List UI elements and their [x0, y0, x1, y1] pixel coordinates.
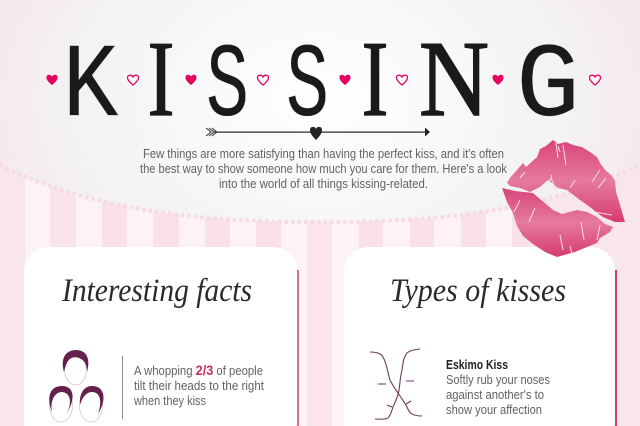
title: N [419, 20, 489, 139]
upper lip [507, 140, 625, 222]
title: S [286, 28, 329, 147]
panel: types of kisses [344, 247, 617, 426]
heading: types of kisses: Types of kisses [390, 273, 566, 309]
canopy backdrop [0, 0, 640, 222]
intro text: the best way to show someone how much you care for them. Here's a look [140, 162, 508, 176]
heading: interesting facts: Interesting facts [61, 273, 252, 309]
text: fact one: when they kiss [133, 394, 206, 408]
title: G [516, 28, 580, 147]
intro text: into the world of all things kissing-related. [219, 177, 428, 191]
intro text: Few things are more satisfying than having the perfect kiss, and it's often [143, 147, 504, 161]
text: eskimo kiss: against another's to [446, 388, 544, 402]
title: S [206, 28, 249, 147]
icon: eskimo kiss faces [370, 349, 422, 419]
title: K [63, 28, 118, 147]
text: fact one: A whopping 2/3 of people [134, 362, 263, 378]
text: fact one: tilt their heads to the right [134, 379, 264, 393]
arrow with heart [206, 127, 430, 140]
text: eskimo kiss: show your affection [446, 403, 542, 417]
icon: lipstick kiss print [502, 140, 625, 257]
text: eskimo kiss: Softly rub your noses [446, 373, 550, 387]
text: eskimo kiss: Eskimo Kiss [446, 358, 508, 372]
icons: title hearts [46, 75, 600, 85]
lower lip [502, 188, 613, 257]
intro text [140, 147, 508, 191]
streaks [514, 143, 612, 254]
text: fact one [133, 362, 264, 408]
icon: three heads [49, 350, 104, 422]
title: I [148, 20, 174, 139]
text: eskimo kiss [446, 358, 550, 417]
title: I [362, 20, 388, 139]
panel: interesting facts [24, 247, 299, 426]
pearl garland [0, 165, 640, 222]
divider [122, 356, 123, 419]
title [63, 20, 580, 147]
